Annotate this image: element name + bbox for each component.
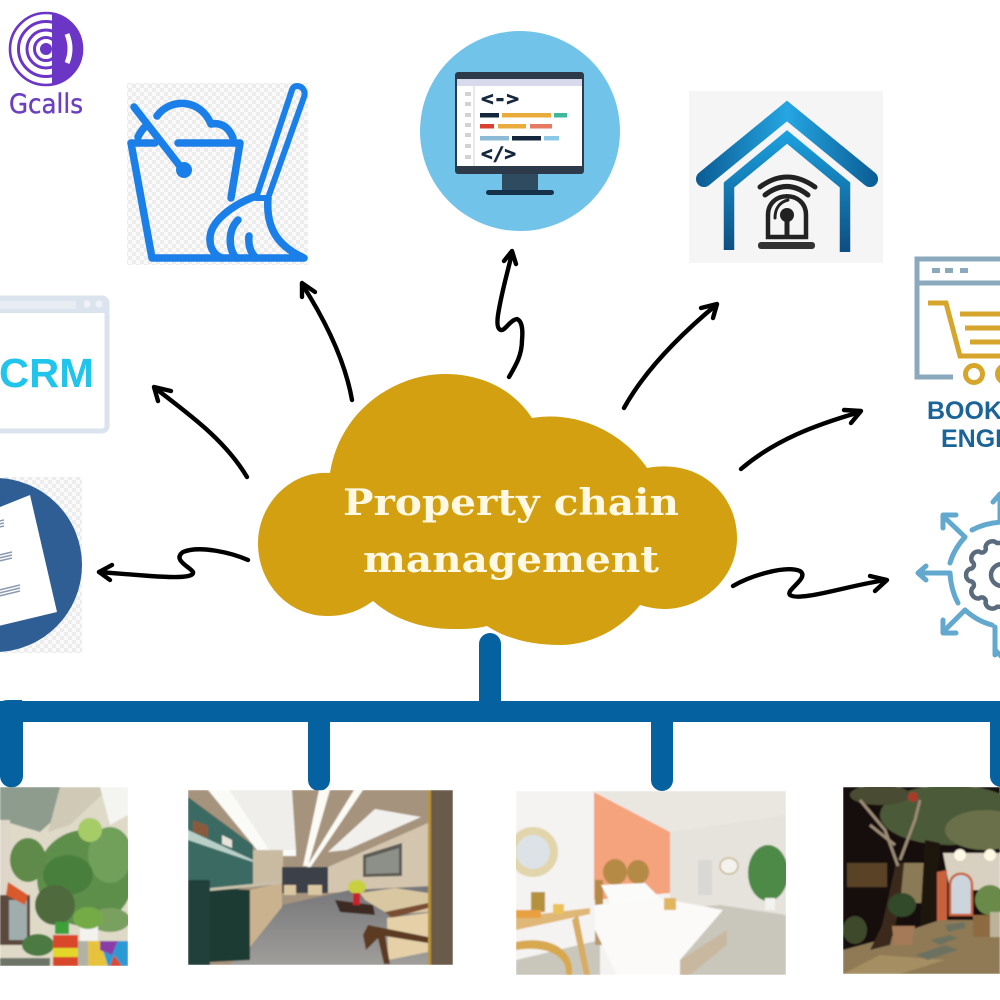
logo: Gcalls — [9, 12, 83, 120]
arrow to booking engine — [741, 410, 861, 469]
icon: home security alarm — [689, 91, 883, 263]
icon: cleaning bucket and broom — [127, 83, 308, 265]
icon: gear with arrows — [918, 494, 1000, 658]
cloud title: Property chain — [343, 482, 679, 524]
arrow to gear — [733, 569, 887, 597]
icon: code monitor — [420, 31, 620, 231]
icon: booking engine — [917, 259, 1000, 453]
photo: hotel bedroom — [512, 791, 788, 975]
icon: code monitor: </> — [481, 143, 516, 165]
icon: CRM window — [0, 298, 107, 431]
photo: hotel courtyard at night — [843, 785, 1000, 974]
icon: CRM window: CRM — [0, 350, 94, 396]
cloud title: management — [363, 539, 659, 581]
logo: Gcalls: Gcalls — [9, 89, 83, 120]
connector tree — [0, 633, 1000, 791]
arrow to document — [99, 549, 248, 580]
arrow to house — [624, 304, 717, 408]
cloud — [258, 374, 737, 645]
icon: code monitor: <-> — [481, 88, 519, 110]
arrow to CRM — [154, 387, 247, 477]
arrow to monitor — [497, 251, 522, 377]
icon: document circle — [0, 477, 82, 653]
photo: hotel entrance garden — [0, 787, 133, 966]
arrows from cloud to icons — [99, 251, 887, 597]
photo: hotel lobby — [188, 790, 453, 965]
arrow to bucket — [302, 283, 352, 400]
